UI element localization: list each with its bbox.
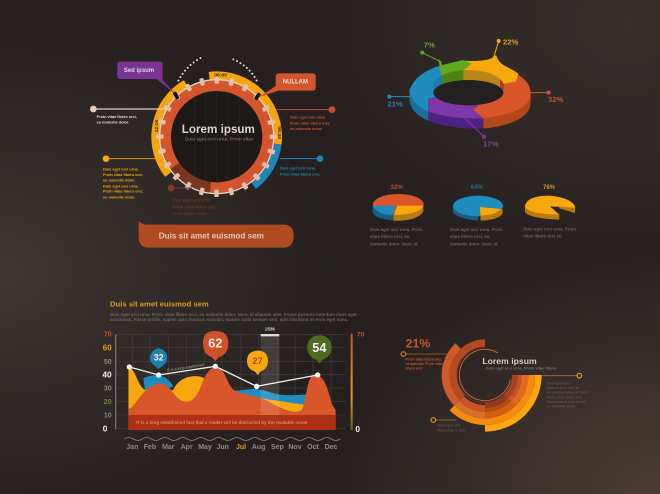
callout: right [542,373,589,409]
label: yellow left: Duis eget orci urna. [103,168,139,172]
label: brown lower [168,185,216,216]
callout: 22% [493,38,519,58]
highlight column: 2536 [265,326,275,331]
callout: 22%: 22% [503,38,519,47]
left axis labels: 20 [104,397,112,406]
label: blue right: Proin vitae libero orci, [280,172,320,176]
callout: lower [431,418,465,432]
right axis scale: 70 [357,331,365,338]
area series [128,367,336,430]
bubble: 27: 27 [253,356,263,366]
callout: right: eu molestie dolor [547,405,576,409]
callout: lower: Duis eget orci [437,424,460,428]
pie: 64%: vitae libero orci, eu [450,234,490,239]
callout: NULLAM [254,73,316,101]
left axis labels: 40 [102,370,112,380]
callout: right: Maecenas in orci at orci [547,400,586,404]
month labels: Nov [288,444,302,451]
bubble: 54: 54 [312,341,326,355]
panel: monthly area chart [102,299,365,451]
caption band [128,415,336,430]
bubble: 62: 62 [208,336,222,350]
callout: 7% [420,41,442,62]
pie: 64%: molestie dolor. Nunc id [450,241,498,246]
donut sides [409,90,531,129]
pie: 32% [370,185,424,246]
right axis scale [351,331,365,434]
grid [116,334,345,430]
bubble: 27 [247,351,268,375]
pie: 32%: vitae libero orci, eu [370,234,410,239]
wavy divider [124,437,340,440]
pie: 32%: molestie dolor. Nunc id [370,241,418,246]
chart description: accumsan. Fusce mollis, sapien quis rhoncus suscipit, mauris nulla semper orci, quis tincidunt mi eros eget nunc. [110,317,348,322]
label: yellow left: eu molestie dolor. [103,179,136,183]
callout: 21%: libero orci [406,367,423,371]
label: brown lower: eu molestie dolor. [173,211,208,216]
month labels: Dec [325,444,338,451]
month labels: Jun [216,444,229,451]
label: orange right: eu molestie dolor. [290,127,323,131]
pie: 64%: 64% [471,185,483,191]
centre title: Duis eget orci urna. Proin vitae [185,136,254,141]
month labels: Aug [252,444,265,451]
callout: 21% [401,336,447,371]
callout: 32%: 32% [548,95,564,104]
left axis labels: 50 [104,359,112,366]
callout: NULLAM: NULLAM [283,80,308,86]
clock labels [154,72,282,139]
left axis labels [102,332,112,434]
donut segments [409,55,531,118]
left axis labels: 60 [103,344,112,353]
left axis labels: 70 [104,332,112,339]
label: yellow left [103,155,156,199]
caption band: IT is a long established fact that a reader will be distracted by the readable conte [136,420,308,425]
month labels: Feb [144,444,156,451]
panel: circular clock diagram [90,52,335,248]
month labels: Mar [162,444,175,451]
left axis labels: 30 [104,386,112,393]
radial title: Lorem ipsum [482,356,537,366]
callout: 21%: 21% [406,336,430,350]
label: white left: eu molestie dolor. [97,120,129,124]
label: blue right: Duis eget orci urna. [280,167,316,171]
pie: 76% [523,185,576,239]
clock labels: 12:00 [154,119,160,132]
bubble: 62 [203,331,228,361]
line series: IT is a long established [167,363,204,373]
callout: right: Maecenas in orci at [547,386,580,390]
radial subtitle: Duis eget orci urna. Proin vitae libero [486,366,557,371]
right axis scale: 0 [355,424,360,434]
callout: 17% [465,118,499,149]
pie: 76%: 76% [543,185,556,191]
panel: three small pie charts [370,185,576,246]
callout: right: Duis eget orci [547,381,570,385]
callout: Sed ipsum: Sed ipsum [124,68,154,74]
clock labels: 06:00 [276,126,282,139]
label: yellow left: Duis eget orci urna. [103,184,139,188]
dotted arcs [178,57,257,82]
pie: 76%: Duis eget orci urna. Proin [523,226,576,231]
left axis labels: 0 [103,424,108,434]
callout: 21% [387,95,411,109]
callout: right: ac condimentum sit amet [547,391,589,395]
pie: 32%: 32% [391,185,403,191]
callout: Sed ipsum [117,62,180,100]
pie: 64% [450,185,503,246]
bubble: 54 [307,335,332,364]
callout: lower: Maecenas in orci [437,428,465,432]
panel: 3D donut chart [387,38,564,149]
month labels [126,444,338,451]
label: yellow left: Proin vitae libero orci, [103,173,143,177]
label: brown lower: Duis eget orci urna. [173,198,211,203]
label: yellow left: Proin vitae libero orci, [103,190,143,194]
label: brown lower: Proin vitae libero orci, [173,204,216,209]
centre title: Lorem ipsum [182,123,255,136]
label: yellow left: eu molestie dolor. [103,195,136,199]
month labels: Jan [126,444,138,451]
label: white left: Proin vitae libero orci, [97,115,137,119]
pie: 64%: Duis eget orci urna. Proin [450,227,503,232]
panel: radial stepped chart [401,318,589,432]
chart description: Duis eget orci urna. Proin vitae libero orci, eu molestie dolor. Nunc id aliquam ante. Fusce posuere interdum risus eget [110,312,357,317]
pie: 76%: vitae libero orci eu [523,234,562,239]
month labels: Jul [236,444,246,451]
callout: right: Proin vitae libero orci [547,395,582,399]
callout: 21%: ut molestie Proin vitae [406,362,443,366]
red ring [165,85,268,188]
highlight column [261,326,279,430]
label: orange right: Proin vitae libero orci, [290,121,330,125]
callout: 7%: 7% [424,41,435,50]
label: orange right [277,106,335,131]
chart title: Duis sit amet euismod sem [110,299,209,308]
month labels: Apr [181,444,193,451]
pie: 32%: Duis eget orci urna. Proin [370,227,423,232]
line series [127,363,320,389]
outer coloured arcs [132,52,301,221]
callout: 21%: 21% [387,100,403,109]
label: blue right [280,155,323,176]
banner: Duis sit amet euismod sem [159,232,264,241]
month labels: May [198,444,212,451]
left axis labels: 10 [104,413,112,420]
bubble: 32 [150,348,167,369]
bubble: 32: 32 [154,352,164,362]
label: white left [90,106,167,124]
callout: 21%: Proin vitae libero orci, [406,358,442,362]
month labels: Sep [271,444,284,451]
callout: 32% [529,91,564,104]
callout: 17%: 17% [483,140,499,149]
radial rings [428,318,542,432]
month labels: Oct [307,444,319,451]
ticks [156,76,277,197]
banner [139,221,294,248]
label: orange right: Duis eget orci urna. [290,116,326,120]
clock labels: 00:00 [214,72,227,78]
donut hole [432,70,504,106]
